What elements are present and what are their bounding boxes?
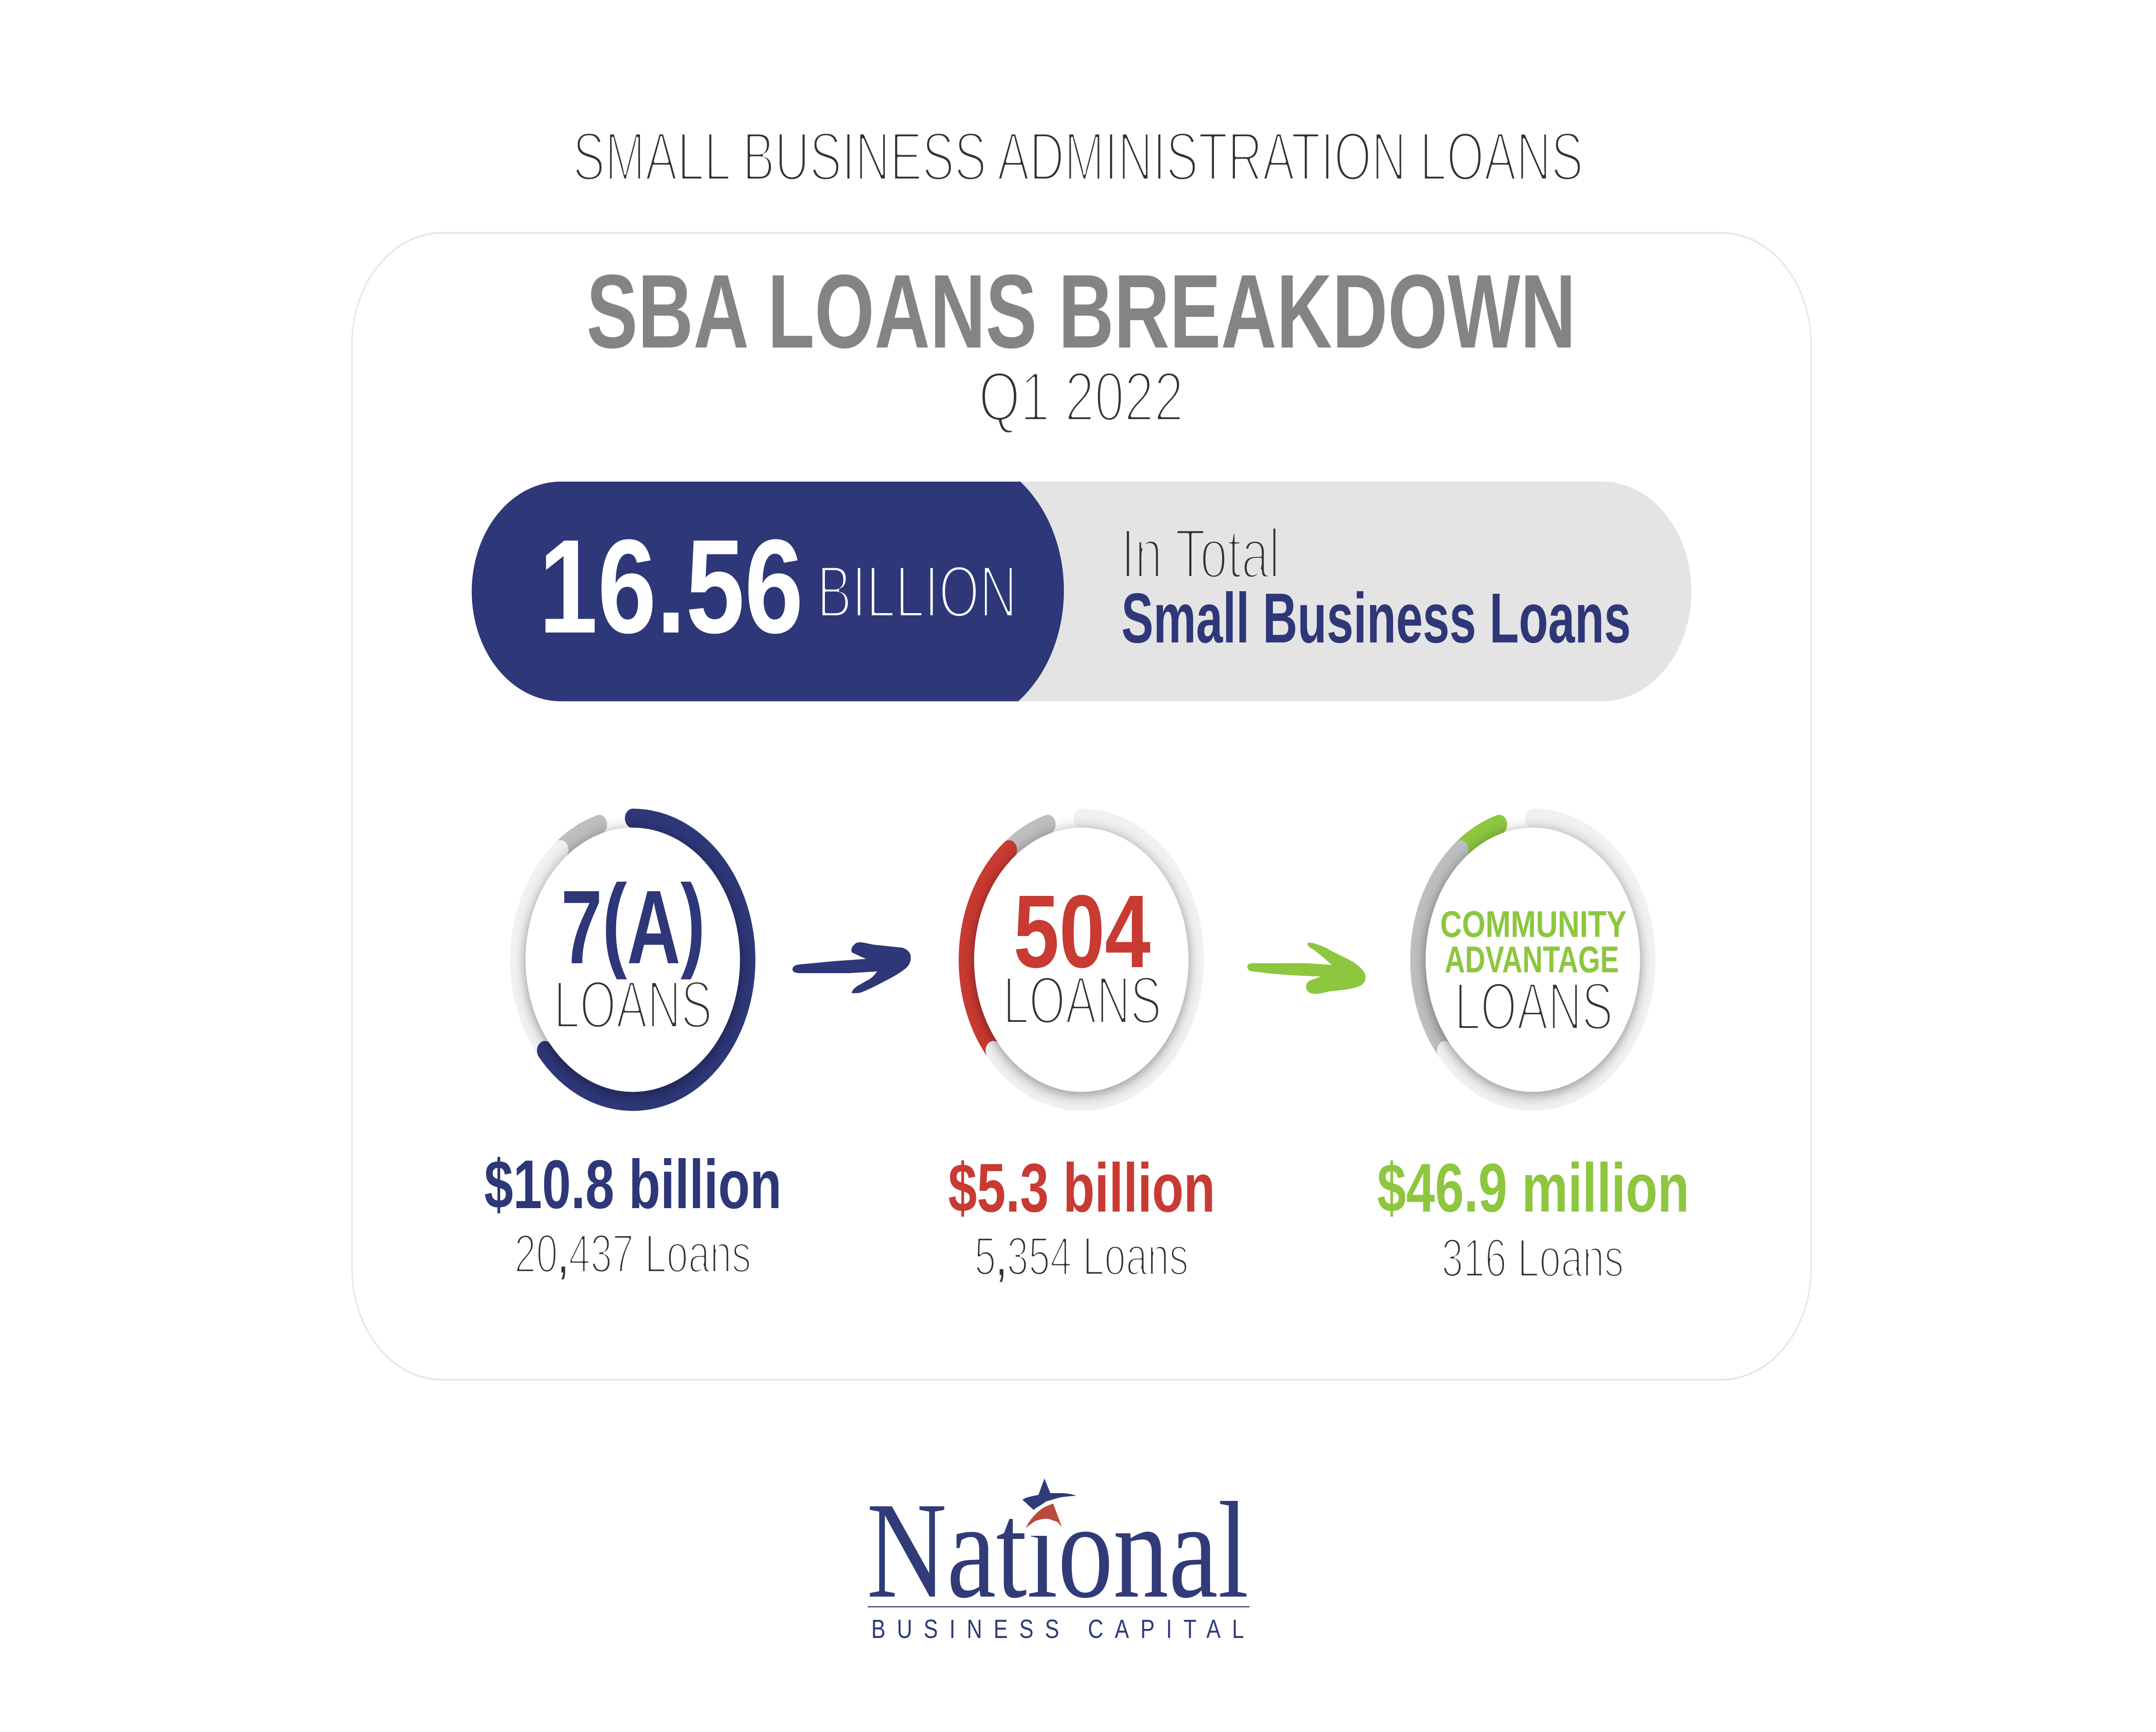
ring label advantage: ADVANTAGE <box>1445 939 1619 980</box>
arrow: navy <box>793 942 911 993</box>
ring: 504 loans <box>967 818 1196 1101</box>
logo rule <box>868 1606 1250 1607</box>
card outline <box>352 233 1811 1380</box>
ring segments <box>518 818 748 1101</box>
subheading: quarter: Q1 2022 <box>979 358 1184 436</box>
logo tagline: BUSINESS CAPITAL <box>871 1614 1244 1644</box>
total caption light: In Total <box>1121 515 1280 593</box>
ring: community advantage loans <box>1418 818 1648 1101</box>
arrow: green <box>1247 943 1366 994</box>
stat: 504 amount: $5.3 billion <box>948 1149 1215 1226</box>
ring label 7(A): A <box>627 868 680 986</box>
logo wordmark: National <box>867 1474 1249 1627</box>
stat: community advantage count: 316 Loans <box>1442 1228 1624 1288</box>
total pill <box>472 482 1691 701</box>
ring segments <box>1418 818 1648 1101</box>
inner disc <box>1426 828 1640 1092</box>
ring label 504: 504 <box>1013 874 1150 990</box>
stat: 7(A) count: 20,437 Loans <box>514 1224 751 1284</box>
stat: community advantage amount: $46.9 million <box>1377 1149 1689 1226</box>
ring label loans: LOANS <box>1003 963 1162 1038</box>
logo star: navy <box>1022 1478 1076 1510</box>
ring label 7(A): ( <box>602 863 627 980</box>
stat: 504 count: 5,354 Loans <box>975 1226 1188 1287</box>
pill background <box>472 482 1691 701</box>
inner disc <box>974 828 1188 1092</box>
total caption bold: Small Business Loans <box>1122 579 1631 658</box>
heading: SBA LOANS BREAKDOWN <box>586 253 1576 370</box>
ring label community: COMMUNITY <box>1440 903 1626 945</box>
inner disc <box>526 828 740 1092</box>
panel: main card <box>352 233 1811 1380</box>
logo: National Business Capital <box>867 1474 1250 1644</box>
pill navy section <box>472 482 1064 701</box>
stat: 7(A) amount: $10.8 billion <box>484 1146 782 1223</box>
total unit: BILLION <box>817 550 1017 633</box>
ring segments <box>967 818 1196 1101</box>
page title: SMALL BUSINESS ADMINISTRATION LOANS <box>573 118 1583 195</box>
logo mask over letter dot <box>1031 1496 1056 1536</box>
logo star: red <box>1026 1503 1062 1528</box>
ring label 7(A): ) <box>680 863 705 980</box>
ring label 7(A): 7 <box>561 868 608 986</box>
ring label loans: LOANS <box>1454 969 1613 1044</box>
ring: 7(A) loans <box>518 818 748 1101</box>
total value: 16.56 <box>539 511 803 661</box>
ring label loans: LOANS <box>554 967 712 1043</box>
